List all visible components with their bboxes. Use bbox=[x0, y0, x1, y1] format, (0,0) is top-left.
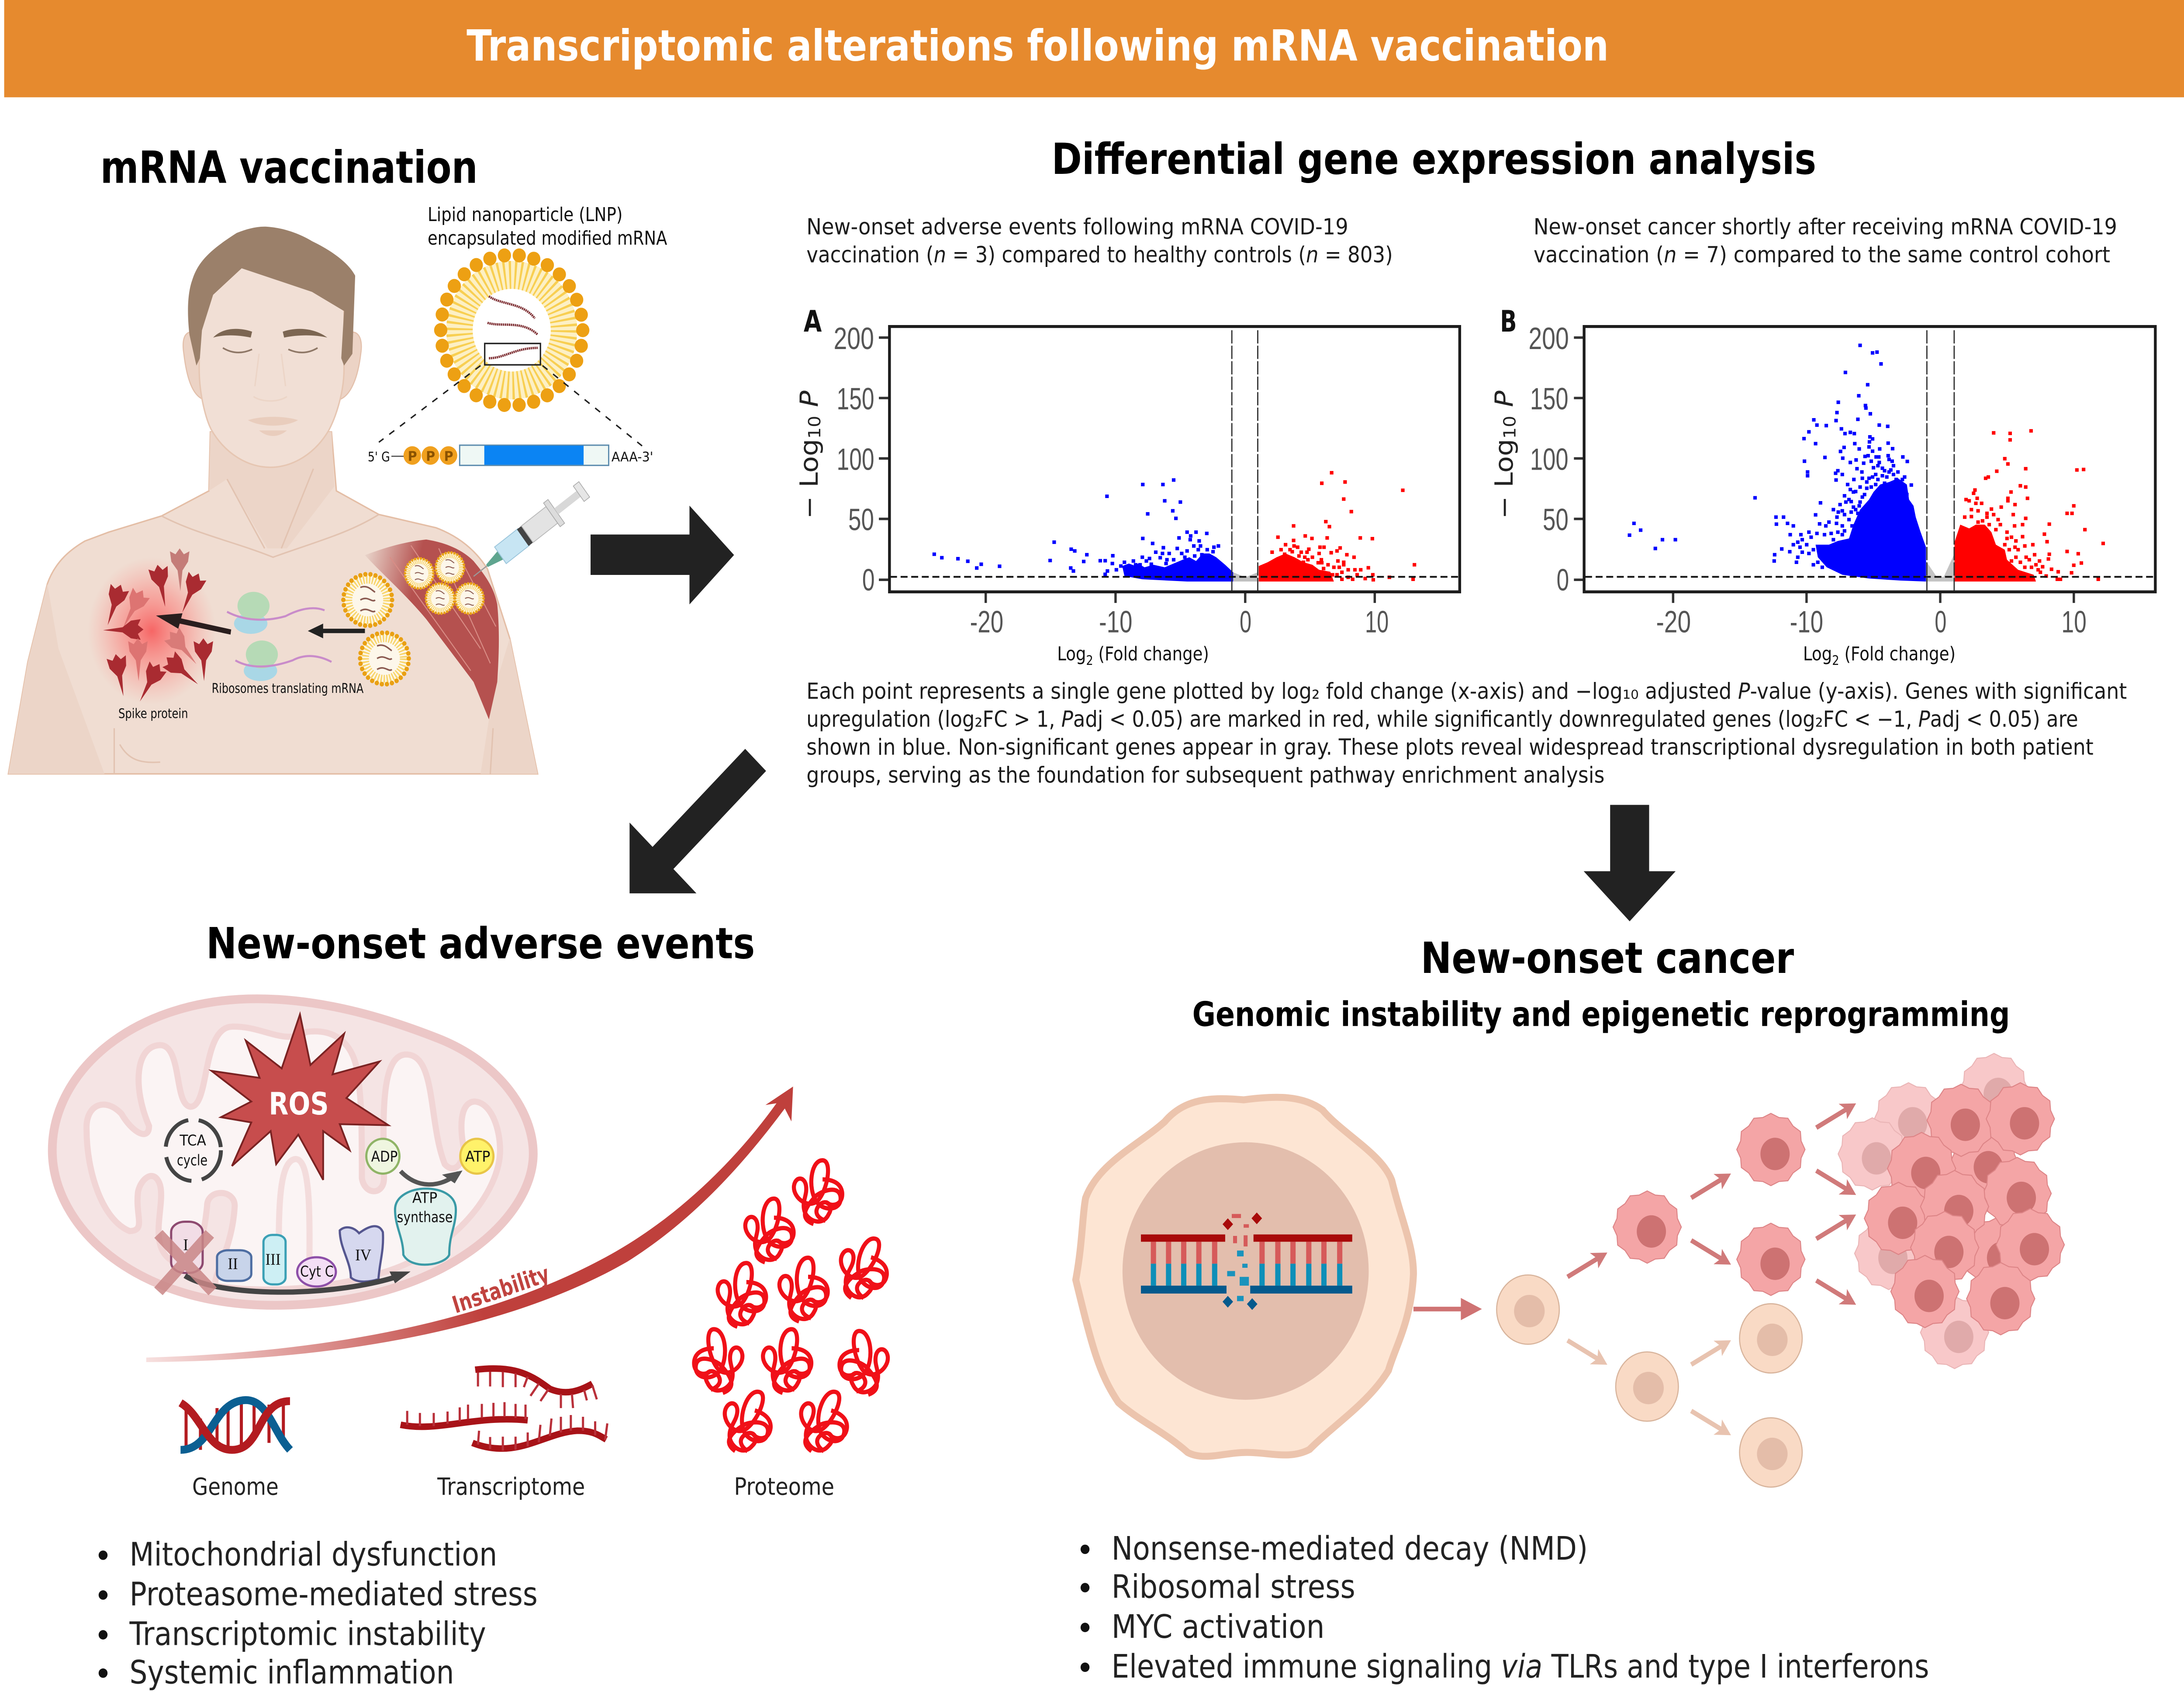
y axis title A: P bbox=[794, 391, 823, 416]
tumor mass bbox=[1838, 1053, 2064, 1369]
label: complex I: I bbox=[183, 1235, 188, 1254]
hair bbox=[188, 227, 355, 366]
threshold lines A bbox=[1232, 330, 1258, 591]
y axis title B: − Log bbox=[1489, 441, 1519, 519]
cristae bbox=[86, 1027, 500, 1290]
panel letter B: B bbox=[1500, 305, 1517, 339]
downregulated scatter A bbox=[934, 478, 1218, 576]
x axis title B: (Fold change) bbox=[1839, 643, 1956, 665]
caption B line 1: New-onset cancer shortly after receiving mRNA COVID-19 bbox=[1534, 214, 2117, 240]
arrow: LNP to ribosome bbox=[308, 623, 365, 638]
list: cancer mechanisms: Ribosomal stress bbox=[1112, 1568, 1355, 1606]
y tick labels A: 50 bbox=[848, 502, 874, 537]
left ear bbox=[183, 332, 204, 399]
large LNPs bbox=[342, 574, 410, 685]
upregulated blob B bbox=[1955, 525, 2036, 581]
spike protein glow bbox=[88, 557, 216, 705]
nose bbox=[253, 354, 287, 401]
heading: cancer: New-onset cancer bbox=[1421, 934, 1794, 983]
ribosomes with mRNA bbox=[227, 592, 332, 681]
list: adverse event mechanisms: Systemic inflammation bbox=[130, 1654, 454, 1692]
ATP bbox=[460, 1139, 494, 1173]
icon: proteome squiggles bbox=[694, 1160, 895, 1459]
y tick labels B: 200 bbox=[1528, 321, 1569, 356]
volcano plot B bbox=[1489, 305, 2155, 668]
mRNA construct: P bbox=[426, 449, 435, 464]
label: LNP line 1: Lipid nanoparticle (LNP) bbox=[428, 204, 622, 226]
label: transcriptome: Transcriptome bbox=[437, 1473, 585, 1501]
y tick labels B: 150 bbox=[1530, 381, 1569, 416]
icon: syringe bbox=[465, 477, 593, 588]
label: LNP line 2: encapsulated modified mRNA bbox=[428, 227, 667, 249]
downregulated blob B bbox=[1816, 478, 1926, 581]
panel: human figure with vaccination bbox=[8, 227, 593, 774]
caption A line 2: vaccination (n = 3) compared to healthy controls (n = 803) bbox=[806, 242, 1393, 268]
list: adverse event mechanisms: Mitochondrial dysfunction bbox=[130, 1536, 497, 1574]
arrow: vaccination to analysis bbox=[591, 505, 734, 604]
ROS burst bbox=[211, 1014, 388, 1180]
mRNA construct: AAA-3' bbox=[612, 449, 653, 464]
label: ROS: ROS bbox=[269, 1086, 329, 1122]
y axis title A: − Log bbox=[794, 441, 823, 519]
downregulated scatter B bbox=[1630, 343, 1911, 569]
panel letter A: A bbox=[804, 305, 822, 339]
normal cells bbox=[1496, 1275, 1802, 1487]
description line 2: upregulation (log₂FC > 1, Padj < 0.05) are marked in red, while significantly downregulated genes (log₂FC < −1, Padj < 0.05) are bbox=[806, 706, 2078, 732]
y tick labels B bbox=[1528, 321, 1569, 597]
arm and neck shading bbox=[8, 432, 538, 774]
ATP arrow bbox=[401, 1171, 459, 1184]
x tick labels A bbox=[970, 605, 1389, 639]
mRNA construct bbox=[368, 445, 653, 465]
y axis title B: P bbox=[1489, 391, 1519, 416]
upregulated blob A bbox=[1259, 554, 1334, 581]
panel: cancer progression bbox=[1076, 1053, 2064, 1487]
collarbones and chest lines bbox=[114, 469, 493, 774]
x tick labels A: -10 bbox=[1099, 605, 1132, 639]
electron transport arrow bbox=[185, 1276, 398, 1292]
x tick labels A: 10 bbox=[1365, 605, 1389, 639]
large cell bbox=[1076, 1097, 1413, 1457]
list: adverse event mechanisms bbox=[99, 1536, 538, 1692]
plot frame A bbox=[889, 326, 1460, 592]
mitochondrion membrane bbox=[52, 999, 533, 1305]
x tick labels B: -10 bbox=[1790, 605, 1823, 639]
list: adverse event mechanisms: Proteasome-mediated stress bbox=[130, 1576, 538, 1613]
caption A line 1: New-onset adverse events following mRNA COVID-19 bbox=[806, 214, 1348, 240]
ADP bbox=[366, 1139, 400, 1173]
large nucleus bbox=[1123, 1142, 1368, 1400]
dashed zoom lines bbox=[379, 366, 642, 446]
y tick labels A: 0 bbox=[862, 563, 875, 597]
x tick labels B: 0 bbox=[1935, 605, 1946, 639]
y tick labels A: 150 bbox=[836, 381, 874, 416]
label: TCA: TCA bbox=[179, 1132, 206, 1149]
x tick labels B: 10 bbox=[2061, 605, 2087, 639]
label: Cyt C: Cyt C bbox=[300, 1263, 334, 1280]
icon: transcriptome RNA bbox=[401, 1369, 607, 1450]
list: cancer mechanisms: Elevated immune signaling via TLRs and type I interferons bbox=[1112, 1648, 1929, 1685]
lips bbox=[248, 417, 298, 436]
description line 4: groups, serving as the foundation for subsequent pathway enrichment analysis bbox=[806, 762, 1604, 788]
mRNA construct: P bbox=[408, 449, 417, 464]
spike proteins bbox=[98, 548, 213, 706]
y axis title B: 10 bbox=[1500, 416, 1520, 439]
heading: differential expression: Differential gene expression analysis bbox=[1052, 135, 1816, 184]
threshold lines B bbox=[1927, 330, 1954, 591]
muscle bbox=[365, 540, 499, 720]
y tick labels A: 200 bbox=[833, 321, 874, 356]
downregulated blob A bbox=[1122, 554, 1233, 581]
y tick labels A bbox=[833, 321, 875, 597]
title banner bbox=[4, 0, 2184, 97]
label: spike protein: Spike protein bbox=[118, 706, 188, 721]
x axis title A: 2 bbox=[1086, 653, 1093, 668]
instability arrow bbox=[146, 1086, 793, 1362]
mutated cells bbox=[1613, 1114, 1805, 1295]
x tick labels B: -20 bbox=[1656, 605, 1691, 639]
arrow: to cancer bbox=[1584, 805, 1676, 921]
description text bbox=[806, 678, 2127, 788]
plot frame B bbox=[1584, 326, 2155, 592]
label: ribosomes: Ribosomes translating mRNA bbox=[212, 681, 363, 696]
x tick labels A: 0 bbox=[1240, 605, 1251, 639]
upregulated scatter B bbox=[1965, 429, 2103, 581]
list: adverse event mechanisms: Transcriptomic instability bbox=[129, 1616, 486, 1653]
heading: adverse events: New-onset adverse events bbox=[206, 919, 755, 969]
description line 1: Each point represents a single gene plotted by log₂ fold change (x-axis) and −log₁₀ adjusted P-value (y-axis). Genes with significant bbox=[806, 678, 2127, 704]
label: proteome: Proteome bbox=[734, 1473, 834, 1501]
arrow: to adverse events bbox=[629, 749, 766, 893]
x axis title B: Log bbox=[1803, 643, 1835, 665]
label: complex II: II bbox=[228, 1255, 238, 1273]
right ear bbox=[340, 332, 361, 399]
y tick labels B: 0 bbox=[1556, 563, 1569, 597]
panel: mitochondrion bbox=[52, 999, 793, 1450]
label: complex IV: IV bbox=[355, 1246, 371, 1264]
tick marks A bbox=[879, 338, 1375, 603]
ATP synthase bbox=[395, 1189, 456, 1265]
complex I inhibited cross bbox=[159, 1234, 213, 1291]
face bbox=[199, 251, 344, 467]
icon: genome DNA bbox=[180, 1400, 290, 1450]
progression arrows bbox=[1563, 1096, 1860, 1443]
x tick labels B bbox=[1656, 605, 2087, 639]
list: cancer mechanisms: Nonsense-mediated decay (NMD) bbox=[1112, 1530, 1588, 1567]
label: ATP synthase 2: synthase bbox=[397, 1208, 453, 1226]
title: Transcriptomic alterations following mRNA vaccination bbox=[467, 21, 1609, 71]
x axis title B: 2 bbox=[1832, 653, 1839, 668]
mRNA construct: P bbox=[444, 449, 453, 464]
label: ATP: ATP bbox=[465, 1148, 490, 1165]
volcano plot A bbox=[794, 305, 1460, 668]
label: cycle: cycle bbox=[177, 1152, 207, 1169]
complex II bbox=[217, 1250, 251, 1281]
points B bbox=[1630, 343, 2103, 581]
non-significant genes A bbox=[1233, 572, 1258, 581]
y tick labels B: 100 bbox=[1530, 442, 1569, 477]
complex IV bbox=[340, 1226, 383, 1282]
tick marks B bbox=[1574, 338, 2074, 603]
non-significant genes B bbox=[1926, 554, 1955, 581]
list: cancer mechanisms: MYC activation bbox=[1112, 1608, 1325, 1646]
label: ATP synthase 1: ATP bbox=[412, 1190, 437, 1207]
subheading: cancer: Genomic instability and epigenetic reprogramming bbox=[1192, 995, 2010, 1034]
upregulated scatter A bbox=[1272, 471, 1414, 581]
y tick labels B: 50 bbox=[1543, 502, 1569, 537]
icon: lipid nanoparticle bbox=[441, 255, 583, 405]
TCA cycle ring bbox=[166, 1120, 221, 1181]
x axis title A: Log bbox=[1057, 643, 1089, 665]
list: cancer mechanisms bbox=[1081, 1530, 1929, 1685]
cytochrome C bbox=[297, 1257, 336, 1287]
caption B line 2: vaccination (n = 7) compared to the same control cohort bbox=[1534, 242, 2110, 268]
description line 3: shown in blue. Non-significant genes appear in gray. These plots reveal widespread transcriptional dysregulation in both patient bbox=[806, 734, 2094, 760]
x tick labels A: -20 bbox=[970, 605, 1003, 639]
label: complex III: III bbox=[265, 1250, 281, 1268]
broken DNA bbox=[1141, 1212, 1352, 1310]
mRNA construct: 5' G bbox=[368, 449, 390, 464]
points A bbox=[934, 471, 1414, 581]
heading: mRNA vaccination: mRNA vaccination bbox=[100, 142, 478, 194]
complex I bbox=[171, 1221, 203, 1273]
complex III bbox=[263, 1235, 286, 1284]
LNPs in muscle bbox=[404, 558, 434, 589]
arrow: cell to progression bbox=[1413, 1298, 1482, 1320]
torso and arms bbox=[8, 432, 538, 774]
arrow: ribosome to spike bbox=[156, 613, 231, 635]
y tick labels A: 100 bbox=[836, 442, 874, 477]
y axis title A: 10 bbox=[805, 416, 825, 439]
eyebrows bbox=[213, 329, 327, 338]
label: genome: Genome bbox=[192, 1473, 279, 1501]
closed eyes bbox=[223, 348, 318, 353]
x axis title A: (Fold change) bbox=[1093, 643, 1209, 665]
label: instability: Instability bbox=[449, 1260, 553, 1319]
label: ADP: ADP bbox=[371, 1148, 397, 1165]
